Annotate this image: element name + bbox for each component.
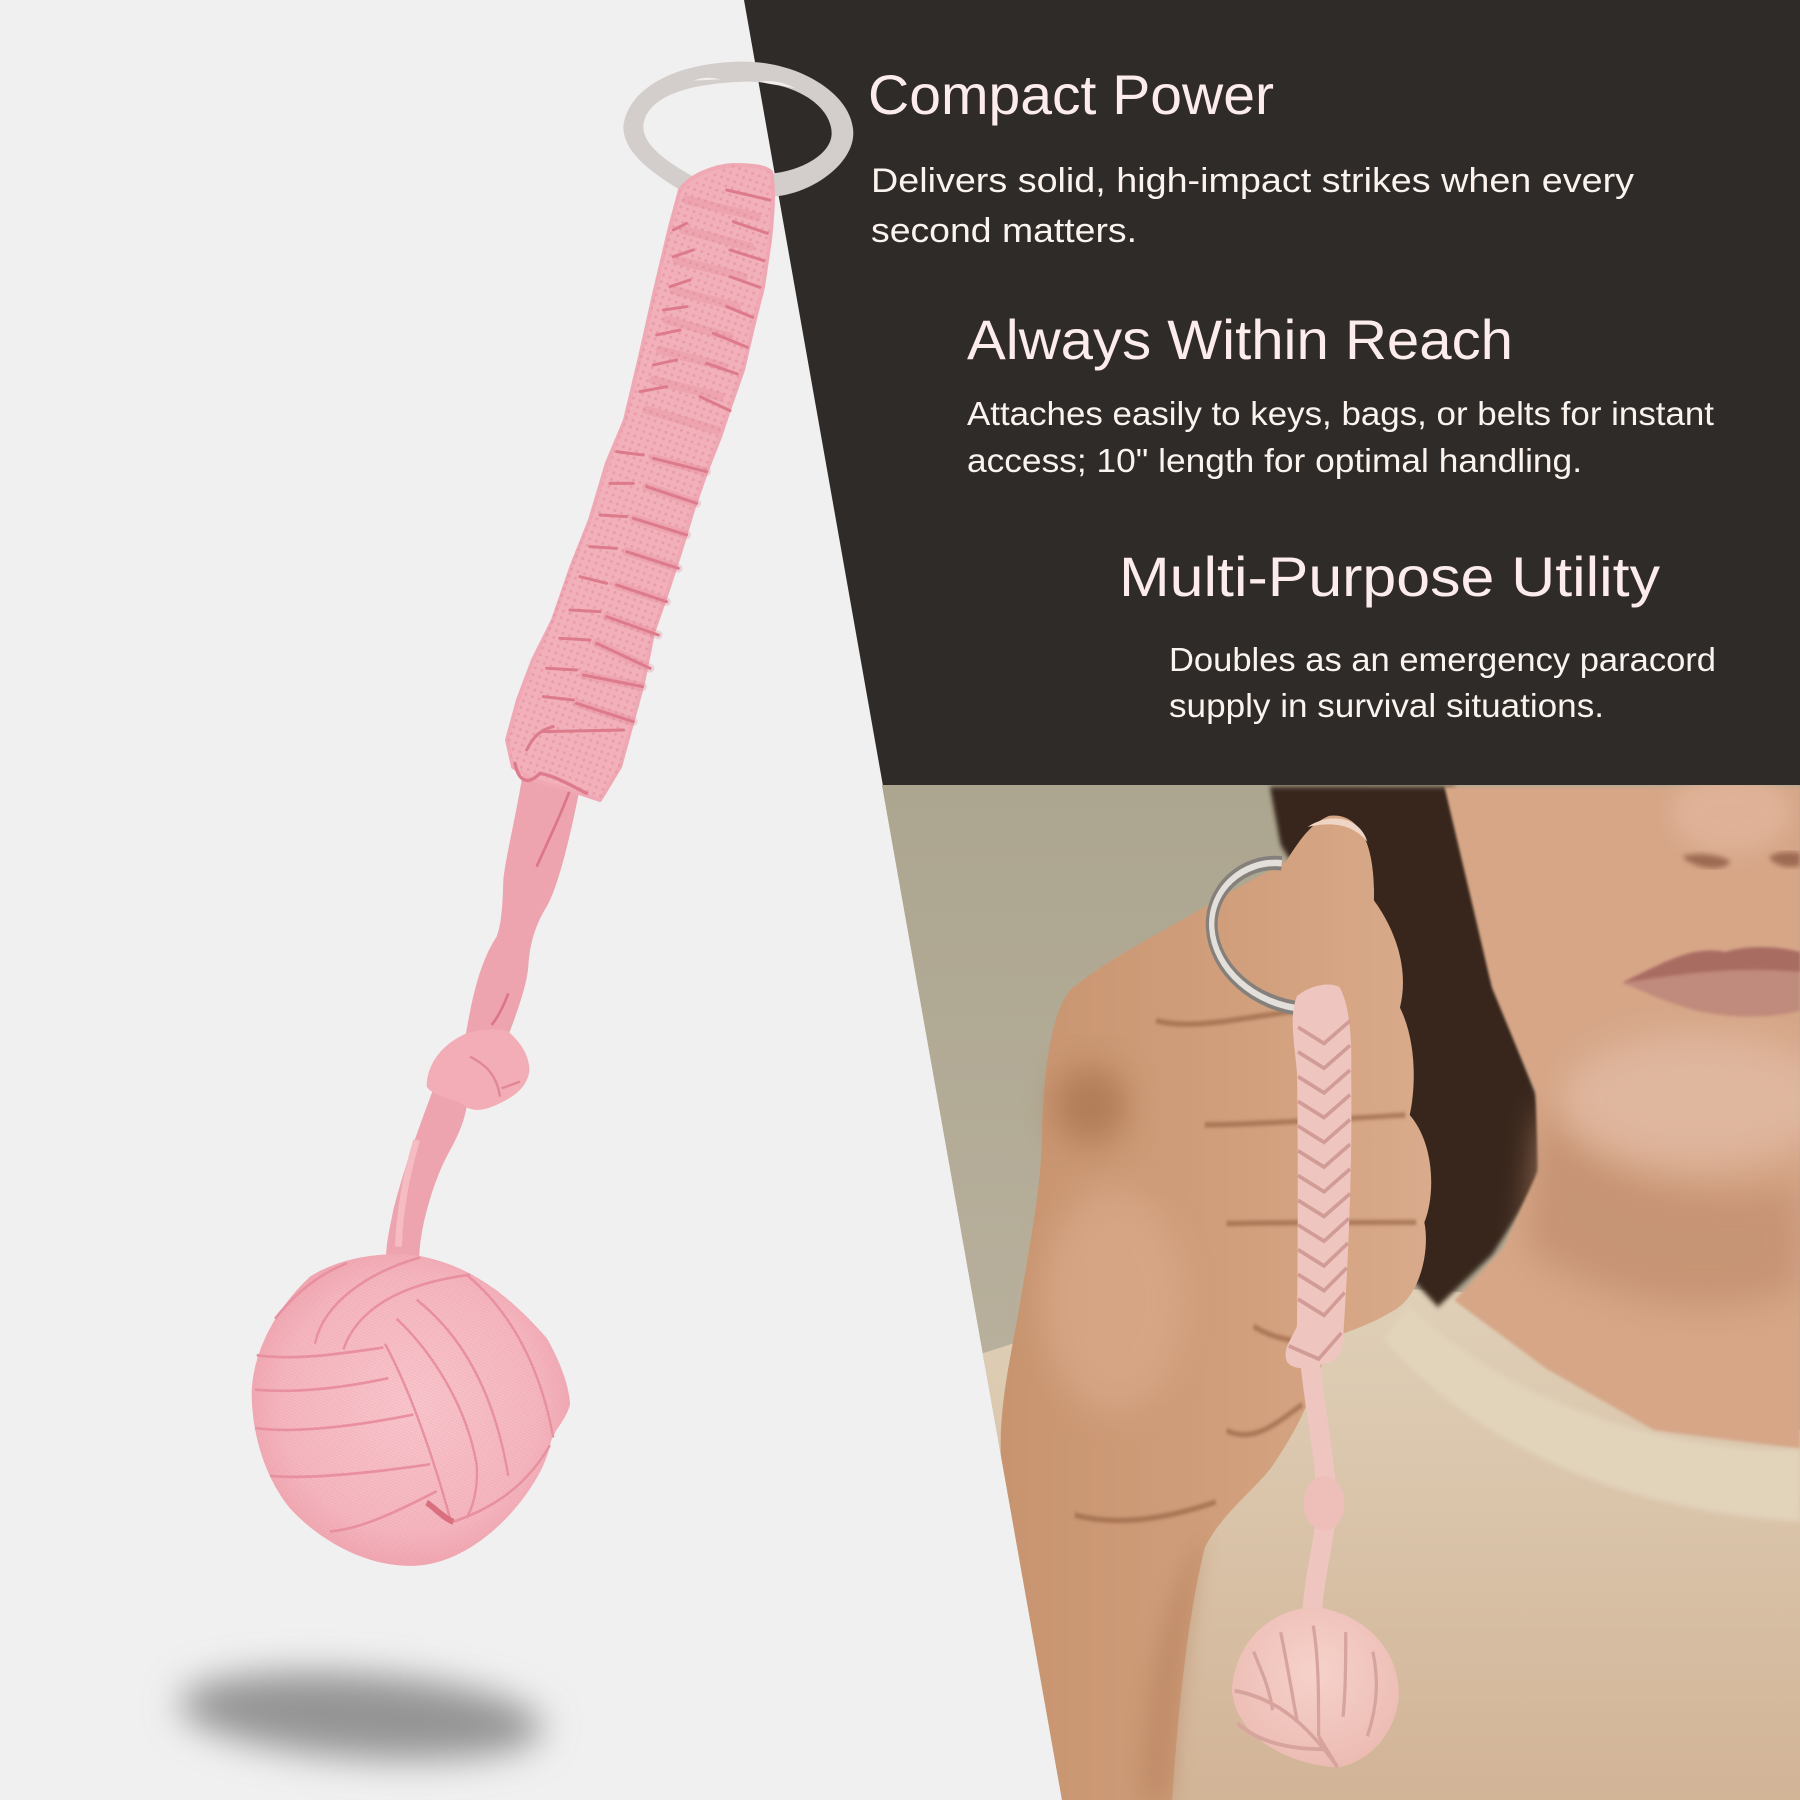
text: Multi-Purpose Utility description: supply in survival situations. [1169,687,1604,724]
text: Compact Power description: Delivers solid, high-impact strikes when every [871,162,1634,200]
thumb nail highlight [1308,818,1367,842]
face highlight [1563,1034,1800,1164]
monkey fist ball [252,1254,570,1566]
cord and small knot [1303,1365,1345,1613]
nose highlight [1673,785,1788,852]
heading: Always Within Reach: Always Within Reach [967,308,1513,371]
nose shadow [1682,852,1800,868]
text: Always Within Reach description: Attaches easily to keys, bags, or belts for instant [967,395,1714,432]
hair [1270,787,1541,1307]
knuckle shading [1053,1066,1129,1144]
key ring [1212,863,1303,1009]
upper lip [1622,948,1800,983]
braid texture [507,165,771,800]
text: Always Within Reach description: access; 10" length for optimal handling. [967,442,1582,479]
shirt [945,1287,1800,1800]
small monkey fist ball [1232,1607,1399,1767]
text: Compact Power description: second matters. [871,212,1137,250]
braided handle [507,165,773,800]
heading: Compact Power: Compact Power [868,63,1274,126]
panel: dark text panel [744,0,1800,786]
lips [1624,969,1800,1018]
braid ridges: upper [640,190,770,411]
shirt collar [1415,1366,1800,1522]
text: Compact Power description [871,162,1634,250]
photo: woman holding keychain in fist [880,773,1800,1800]
highlight on hand [1042,1190,1183,1411]
hand [1001,816,1431,1800]
cord strands [386,770,583,1257]
neck shadow under chin [1525,1105,1800,1306]
face and neck [1444,787,1800,1449]
braid ridges: lower [515,452,707,793]
text: Multi-Purpose Utility description [1169,641,1716,724]
wall background [882,785,1016,1366]
key ring [623,62,853,197]
braid ridge shading [577,200,757,722]
text: Multi-Purpose Utility description: Doubles as an emergency paracord [1169,641,1716,678]
heading: Multi-Purpose Utility: Multi-Purpose Utility [1119,545,1660,608]
product shadow [177,1661,545,1771]
finger creases [1075,1011,1416,1520]
small cord knot [427,1029,529,1110]
wrist shading [1140,1528,1205,1800]
braided handle [1286,984,1351,1368]
text: Always Within Reach description [967,395,1714,479]
product: paracord monkey fist keychain [252,62,853,1566]
